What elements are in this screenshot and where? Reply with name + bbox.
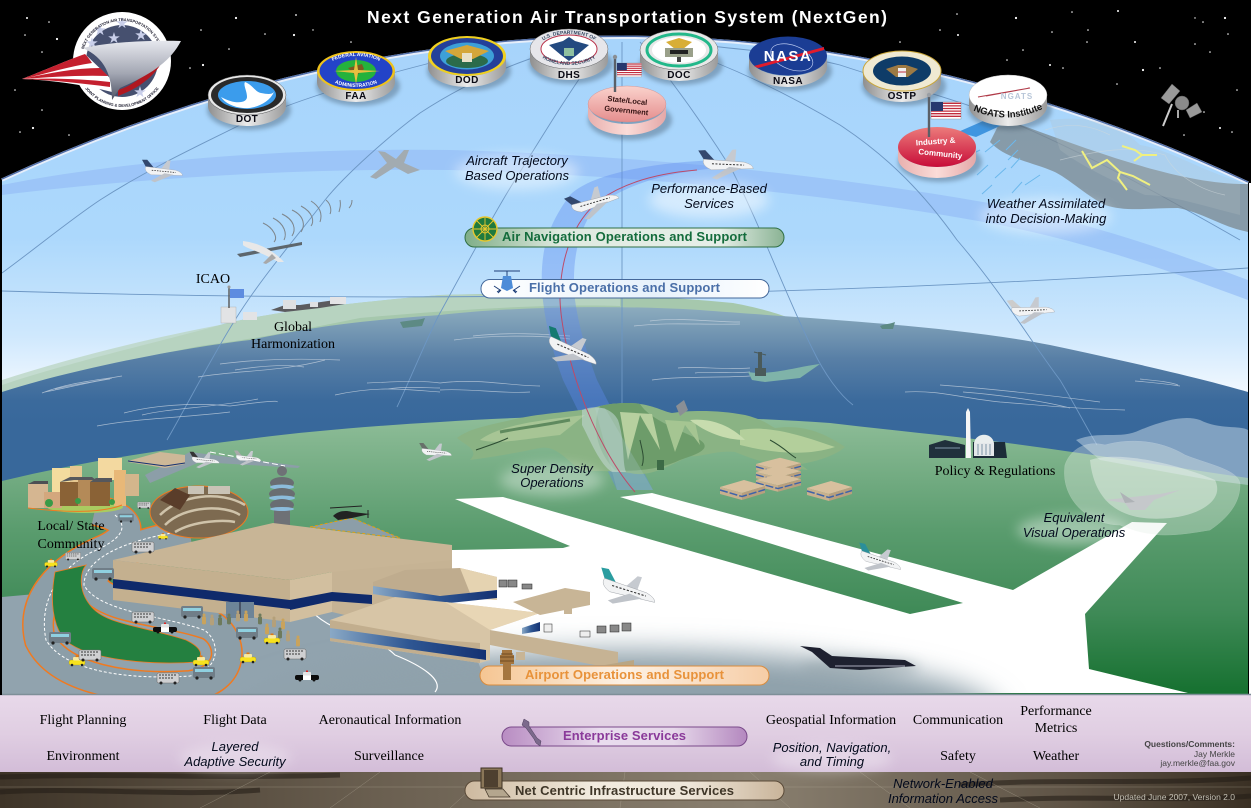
panel: net centric infrastructure floor <box>0 772 1251 808</box>
lightning bolts <box>1082 146 1157 190</box>
State/Local Government coin with flag <box>588 55 672 140</box>
label: Equivalent Visual Operations: Visual Operations <box>1023 525 1126 540</box>
logo: JPDO seal: JOINT PLANNING & DEVELOPMENT OFFICE <box>86 87 159 107</box>
logo: JPDO seal: NEXT GENERATION AIR TRANSPORTATION SYSTEM <box>81 18 160 49</box>
enterprise services labels: Metrics <box>1035 721 1077 736</box>
weather link wedge <box>958 118 1002 137</box>
label: Local/ State Community <box>37 519 105 552</box>
label: Super Density Operations: Super Density <box>511 461 594 476</box>
label: Position, Navigation, and Timing: Position, Navigation, <box>773 740 891 755</box>
enterprise services labels <box>40 704 1092 764</box>
enterprise services labels: Weather <box>1033 749 1079 764</box>
label: Weather Assimilated into Decision-Making: Weather Assimilated <box>987 196 1106 211</box>
label: Global Harmonization: Global <box>274 320 312 335</box>
contact block: Jay Merkle <box>1194 749 1235 759</box>
passengers <box>202 610 300 646</box>
rail yard <box>150 486 248 538</box>
ocean <box>2 307 1248 500</box>
bar: Flight Operations and Support: Flight Operations and Support <box>529 280 721 295</box>
label: Layered Adaptive Security: Layered <box>212 739 259 754</box>
label: Super Density Operations <box>511 461 594 490</box>
label: Network-Enabled Information Access <box>888 776 999 806</box>
label: Policy and Regulations: Policy & Regulations <box>935 464 1055 479</box>
logo: JPDO seal: ★ <box>93 22 107 39</box>
agency coin: DOC: DOC <box>667 70 691 81</box>
left page edge <box>0 180 2 695</box>
agency coin: DHS: DHS <box>558 70 580 81</box>
bar: Airport Operations and Support <box>480 650 769 685</box>
enterprise services labels: Aeronautical Information <box>319 713 461 728</box>
label: ICAO: ICAO <box>196 272 230 287</box>
enterprise services labels: Safety <box>940 749 976 764</box>
agency coin: NASA <box>748 36 832 91</box>
bar: Airport Operations and Support: Airport Operations and Support <box>525 667 725 682</box>
local community buildings <box>28 458 139 513</box>
State/Local Government coin with flag: State/Local <box>607 94 648 107</box>
logo: JPDO seal <box>22 12 181 110</box>
agency coin: DOD: DOD <box>455 75 479 86</box>
bar: Net Centric Infrastructure Services: Net Centric Infrastructure Services <box>515 783 734 798</box>
label: Weather Assimilated into Decision-Making: into Decision-Making <box>986 211 1107 226</box>
UAV with datalink arcs <box>237 200 352 264</box>
label: Weather Assimilated into Decision-Making <box>986 196 1107 226</box>
label: Equivalent Visual Operations <box>1023 510 1126 540</box>
jetways <box>490 588 634 666</box>
low visibility cloud <box>1064 418 1248 535</box>
bar: Enterprise Services <box>502 719 747 746</box>
satellite <box>1161 84 1202 126</box>
agency coin: DOT: DOT <box>236 114 258 125</box>
NGATS Institute coin: NGATS Institute <box>974 104 1042 118</box>
corridor over mountains and trajectory path <box>560 170 697 492</box>
agency coin: DHS <box>527 28 614 86</box>
agency coin: FAA: ADMINISTRATION <box>334 80 377 87</box>
agency coin: FAA: FAA <box>345 91 367 102</box>
label: Performance-Based Services: Services <box>684 196 734 211</box>
far coast <box>2 294 790 392</box>
label: Super Density Operations: Operations <box>520 475 584 490</box>
italic capability label glows <box>455 154 1129 545</box>
bar: Net Centric Infrastructure Services <box>465 768 784 800</box>
helipad and helicopter <box>310 506 400 538</box>
logo: JPDO seal: ★ <box>85 35 99 52</box>
label: Aircraft Trajectory Based Operations: Aircraft Trajectory <box>465 153 569 168</box>
label: Network-Enabled Information Access: Information Access <box>888 791 999 806</box>
ground vehicles <box>45 502 319 684</box>
panel: enterprise services background <box>0 695 1251 772</box>
ICAO headquarters buildings <box>221 286 346 323</box>
Industry & Community coin with flag <box>898 93 982 182</box>
small terminal and distant taxiway <box>128 450 300 483</box>
runways and apron <box>360 493 1188 693</box>
label: Aircraft Trajectory Based Operations <box>465 153 570 183</box>
NGATS Institute coin <box>966 74 1054 132</box>
agency coin: DOT <box>207 75 291 130</box>
agency coin: DOD <box>427 36 511 91</box>
enterprise services labels: Flight Data <box>203 713 267 728</box>
control tower <box>269 466 295 530</box>
label: Layered Adaptive Security <box>179 739 291 772</box>
fighter jet <box>370 150 420 179</box>
enterprise services labels: Performance <box>1020 704 1092 719</box>
agency coin: NASA: NASA <box>773 76 803 87</box>
State/Local Government coin with flag: Government <box>604 104 649 117</box>
enterprise services labels: Communication <box>913 713 1003 728</box>
label: Performance-Based Services: Performance-Based <box>651 181 768 196</box>
agency coin: FAA: FEDERAL AVIATION <box>332 52 380 61</box>
right page margin <box>1249 183 1251 695</box>
road system <box>38 510 437 692</box>
agency coin: DOC <box>639 30 723 85</box>
Industry & Community coin with flag: Community <box>918 147 963 161</box>
label: Network-Enabled Information Access: Network-Enabled <box>893 776 994 791</box>
main terminal building <box>113 523 540 663</box>
label: Global Harmonization: Harmonization <box>251 337 335 352</box>
upper airspace band <box>2 150 1248 300</box>
version note: Updated June 2007, Version 2.0 <box>1114 792 1235 802</box>
grey ground <box>2 585 490 694</box>
green land <box>2 416 1248 695</box>
other aircraft and small vessels <box>400 294 1056 461</box>
ocean waves <box>42 319 1180 426</box>
contact block: jay.merkle@faa.gov <box>1159 758 1236 768</box>
bar: Flight Operations and Support <box>481 271 769 298</box>
stacked buildings <box>720 458 852 501</box>
stars <box>14 10 1238 136</box>
label: Position, Navigation, and Timing <box>772 740 892 773</box>
rain streaks <box>970 120 1040 194</box>
Policy and Regulations landmarks <box>929 408 1007 458</box>
logo: JPDO seal: ★ <box>115 15 129 32</box>
enterprise services labels: Surveillance <box>354 749 424 764</box>
label: Global Harmonization <box>251 320 335 352</box>
Industry & Community coin with flag: Industry & <box>916 136 956 147</box>
bar: Air Navigation Operations and Support <box>465 217 784 247</box>
agency coin: OSTP <box>862 51 946 106</box>
logo: JPDO seal: ★ <box>107 30 121 47</box>
bar: Air Navigation Operations and Support: Air Navigation Operations and Support <box>502 229 748 244</box>
meridian and horizon grid lines <box>2 40 1248 445</box>
upper aircraft <box>142 148 754 225</box>
contact block: Questions/Comments: <box>1144 739 1235 749</box>
storm cloud <box>990 118 1248 232</box>
label: Aircraft Trajectory Based Operations: Based Operations <box>465 168 570 183</box>
enterprise services labels: Environment <box>46 749 120 764</box>
logo: JPDO seal: ★ <box>134 27 148 44</box>
bar: Enterprise Services: Enterprise Services <box>563 728 686 743</box>
label: Performance-Based Services <box>651 181 768 211</box>
enterprise services labels: Flight Planning <box>40 713 126 728</box>
agency coin: NASA: NASA <box>764 48 812 65</box>
title: Next Generation Air Transportation System (NextGen) <box>367 7 887 27</box>
contact block <box>1144 739 1236 768</box>
label: Local/ State Community: Community <box>38 537 104 552</box>
logo: JPDO seal: ★ <box>133 84 147 101</box>
agency coin: DHS: HOMELAND SECURITY <box>542 55 594 65</box>
runway aircraft <box>594 543 920 678</box>
mountains <box>457 403 845 474</box>
label: Layered Adaptive Security: Adaptive Security <box>183 754 287 769</box>
label: Local/ State Community: Local/ State <box>37 519 105 534</box>
label: Position, Navigation, and Timing: and Timing <box>800 754 865 769</box>
agency coin: FAA <box>314 51 402 108</box>
label: Equivalent Visual Operations: Equivalent <box>1044 510 1106 525</box>
NGATS Institute coin: NGATS <box>1001 92 1033 101</box>
aircraft carrier <box>748 352 820 382</box>
enterprise services labels: Geospatial Information <box>766 713 896 728</box>
agency coin: OSTP: OSTP <box>888 91 916 102</box>
trajectory corridor band <box>542 160 720 490</box>
apron service equipment <box>499 580 631 637</box>
inner green island <box>52 565 201 663</box>
agency coin: DHS: U.S. DEPARTMENT OF <box>542 30 596 40</box>
